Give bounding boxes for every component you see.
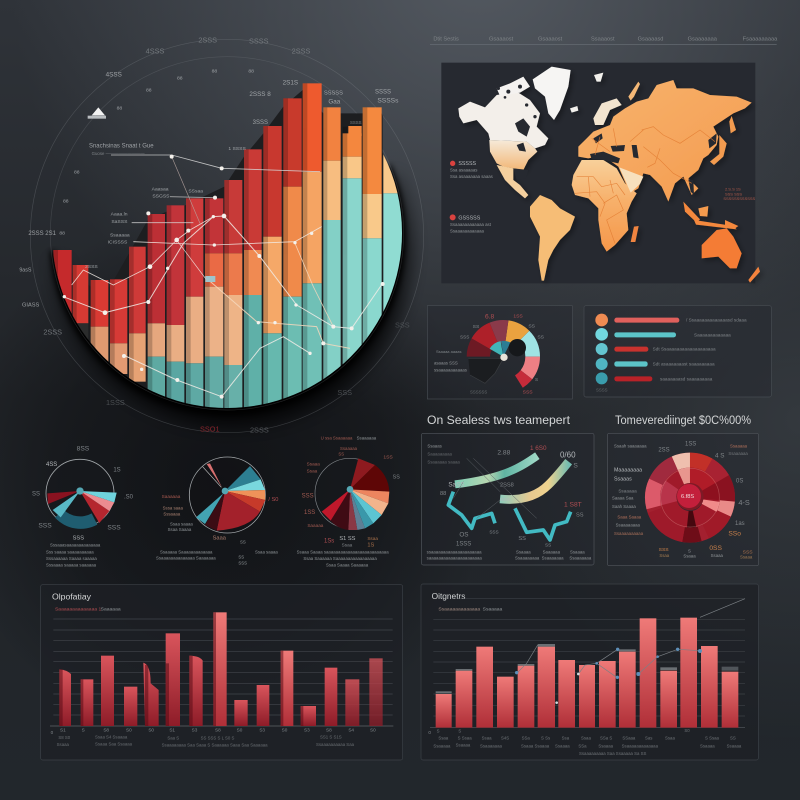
- chart labels: 88: [212, 69, 217, 75]
- left chart axis labels: S3: [259, 728, 265, 733]
- left chart axis labels: Saa S: [167, 735, 179, 740]
- panel: left bar chart: [41, 585, 403, 760]
- right chart axis labels: S4S: [501, 735, 509, 740]
- right chart axis labels: Ssaaa Ssaaaa: [521, 743, 550, 748]
- right chart axis labels: SSaaa: [622, 735, 636, 740]
- chart labels: Guose —————————: [92, 151, 145, 156]
- right chart axis labels: S Ss: [541, 735, 550, 740]
- chart labels: ICISSSS: [108, 239, 128, 245]
- pie 1: Sss saaaa saaaaaaaaaa: [46, 549, 94, 554]
- donut outer ring: [639, 447, 741, 549]
- left chart title: Saaaaaa: [101, 606, 121, 612]
- pie 1: .S0: [124, 494, 134, 500]
- pie 3: Ssaaa Saaaa saaaaaaaaaaaaaaaaaaaaaaaaaa: [297, 549, 389, 554]
- donut labels: Ssaaas: [614, 476, 632, 482]
- ribbon labels: Saaaaaaaaa: [427, 452, 452, 457]
- map background: [441, 63, 755, 283]
- chart labels: 88: [59, 231, 65, 237]
- left chart grid: [50, 619, 393, 726]
- pie 2: [156, 457, 278, 565]
- donut labels: Ssaaa: [740, 554, 753, 559]
- chart labels: 88: [63, 199, 69, 205]
- left chart axis labels: S3: [192, 728, 198, 733]
- ribbon labels: Ssaaaaaa saaaa: [427, 459, 460, 464]
- pie 2: / S0: [268, 497, 278, 503]
- right chart axis labels: S: [458, 729, 461, 734]
- left chart bar sides: [59, 612, 303, 726]
- pie 3: Ssaaa: [307, 462, 320, 467]
- chart labels: Snachsinas Snaat t Gue: [89, 144, 154, 150]
- ribbon labels: S: [573, 463, 578, 470]
- panel: world map header labels: [430, 36, 778, 44]
- pie 2: SSS: [238, 560, 247, 565]
- pie 3: 1SS: [383, 455, 393, 461]
- pie 2: Ssaaaaa Saaaaaaaaaaaaa: [160, 549, 213, 554]
- right chart axis labels: Ssaa: [581, 735, 591, 740]
- ribbon labels: SSS: [500, 497, 511, 503]
- pie 3: U ssa Ssaaaaaa: [321, 435, 353, 440]
- chart labels: 2SSS 8: [249, 91, 271, 98]
- gauge labels: 6.8: [485, 313, 495, 320]
- ribbon labels: SaSS: [448, 481, 465, 488]
- right chart bar caps: [436, 644, 738, 693]
- right chart title: Ssaaaaaaaaaaaaa: [438, 607, 480, 613]
- gauge labels: ssaaaaaaaaaaas: [434, 368, 467, 373]
- panel: world map header labels: Gsaaaaaaa: [688, 36, 718, 42]
- ribbon labels: Ssaaas: [427, 443, 442, 448]
- pie 2: Ssaa Saaaa: [168, 527, 192, 532]
- pie 3: Ssaaaaaa: [357, 435, 377, 440]
- gauge labels: SS: [528, 324, 536, 330]
- ribbon labels: SS: [576, 513, 584, 519]
- left chart axis labels: Ssaaa: [57, 742, 70, 747]
- left chart axis labels: S4: [348, 728, 354, 733]
- pie 3: Ssaaaaa: [340, 446, 358, 451]
- right chart axis labels: Ssa: [562, 735, 570, 740]
- right chart axis labels: Ssaa: [482, 735, 492, 740]
- chart labels: SSO1: [200, 425, 220, 434]
- pie 2: Sssa saaa: [163, 505, 183, 510]
- chart labels: 4SSS: [106, 72, 122, 79]
- chart labels: 2SSS 2S1: [28, 231, 57, 237]
- right chart grid: [430, 599, 745, 727]
- list row 2: [595, 328, 731, 341]
- right chart axis labels: SSa S: [600, 735, 612, 740]
- pie 2: Ssaa saaaa: [170, 522, 193, 527]
- heading: sankey: On Sealess tws teamepert: [427, 413, 571, 427]
- pie 2: Sssaaaa: [163, 511, 181, 516]
- chart labels: 88: [117, 105, 122, 111]
- chart labels: 2SSS: [250, 426, 269, 435]
- donut labels: Ssaaaaaa: [728, 451, 748, 456]
- chart labels: 88: [248, 69, 254, 75]
- donut labels: 1SS: [685, 442, 696, 448]
- left chart axis labels: SS1 S S1S: [320, 735, 342, 740]
- ribbon labels: Ssaaaaaaa: [542, 555, 564, 560]
- left chart axis labels: S0: [148, 728, 154, 733]
- ribbon labels: Ssaaaa: [570, 549, 585, 554]
- donut labels: 0S: [736, 478, 743, 484]
- right chart axis labels: Sas: [645, 735, 652, 740]
- chart labels: SSSSS: [324, 90, 343, 96]
- right chart axis labels: Ssaaaaaaaaaaaaa: [622, 743, 659, 748]
- land masses: old world: [572, 80, 760, 283]
- chart labels: SSS: [395, 320, 410, 329]
- chart labels: 2SSS: [292, 46, 311, 55]
- gauge labels: asaaas SSS: [434, 360, 458, 365]
- pie 3: Ssaa Saaaa Saaaaaa: [326, 563, 369, 568]
- chart labels: Gaa: [328, 98, 341, 105]
- left chart axis labels: S1: [60, 728, 66, 733]
- pie 1: [32, 446, 134, 568]
- donut center value: [676, 483, 704, 510]
- donut labels: Ssaaa: [711, 553, 724, 558]
- right chart axis labels: Ssaaaaaaaaa Saa Ssaaaaa Sa SS: [579, 751, 646, 756]
- ribbon labels: saaaaaaaaaaaaaaaaaaaaaa: [427, 555, 482, 560]
- ribbon labels: SSS: [489, 529, 499, 534]
- left chart axis labels: Ssaaaaaaaaaa Saa: [316, 742, 355, 747]
- right chart axis labels: Ssaaaaa: [433, 743, 451, 748]
- land masses: americas: [458, 67, 603, 281]
- left chart axis labels: S8 S0: [58, 735, 71, 740]
- chart labels: SaSSS: [111, 219, 128, 225]
- panel: world map header labels: Dtit Sestis: [433, 36, 459, 42]
- list row 4: [596, 358, 715, 370]
- chart labels: 2SSS: [198, 36, 217, 45]
- chart labels: SSGSS: [152, 194, 170, 200]
- left chart axis labels: S8: [326, 728, 332, 733]
- right chart axis labels: SSa: [578, 743, 587, 748]
- donut labels: Saah Saaaa: [612, 504, 636, 509]
- left chart axis labels: S0: [237, 728, 243, 733]
- left chart axis labels: S: [82, 728, 85, 733]
- panel: gauge: [427, 306, 572, 399]
- pie 3: 1S: [367, 543, 374, 549]
- left chart axis labels: S0: [282, 728, 288, 733]
- pie 2: Saaaaaa: [162, 494, 181, 499]
- panel: world map header labels: Gsaaaasd: [638, 36, 663, 42]
- chart labels: 9asS: [19, 267, 32, 273]
- map legend: Ssa asaaaaas: [450, 168, 477, 173]
- panel: world map header labels: Fsaaaaaaaaa: [743, 36, 778, 42]
- right chart axis labels: S Ssaa: [458, 735, 472, 740]
- ribbon labels: SS: [545, 543, 551, 548]
- panel: ribbon flow chart: [421, 433, 594, 565]
- ribbon labels: 88: [440, 491, 446, 497]
- left chart axis labels: Ssaaa Saa Ssaaaa: [95, 741, 133, 746]
- gauge labels: SSS: [460, 334, 469, 339]
- ribbon labels: 1 S8T: [564, 502, 582, 509]
- list row 5: [596, 372, 713, 384]
- gauge labels: [434, 313, 545, 396]
- ribbon labels: [427, 443, 592, 560]
- donut labels: 1as: [735, 521, 745, 527]
- donut labels: Ssaaaaa: [730, 444, 748, 449]
- list row 4: Sdt asaaaaaaast saaaaaaaaa: [653, 362, 715, 367]
- chart labels: SSSS: [249, 36, 269, 45]
- chart labels: SSsaa: [188, 189, 203, 195]
- right chart axis labels: Ssaa: [665, 735, 675, 740]
- left chart title: Saaaaaaaaaaaaaa 1: [55, 606, 102, 612]
- list row 1: / Ssaaaaaaaaaaaaasd sdaaa: [686, 318, 747, 323]
- donut labels: 0SS: [709, 545, 722, 552]
- donut inner ring: [660, 468, 720, 527]
- right chart title: [432, 591, 503, 613]
- gauge labels: SS: [473, 324, 480, 330]
- pie 1: Sssaaasaaaaaaaaaaaaaa: [50, 543, 101, 548]
- left chart axis labels: S8: [103, 728, 109, 733]
- list row 5: saaaaaaasd saaaaaaaaa: [660, 376, 713, 381]
- icon: triangle marker: [88, 107, 106, 119]
- donut labels: 4 S: [715, 453, 724, 460]
- donut labels: [612, 442, 753, 559]
- donut labels: SSS: [659, 547, 669, 553]
- ribbon labels: Saaaaaa: [543, 549, 561, 554]
- pie 3: Ssaa Saaaaaa Saaaaaaaaaaaaaaaaa: [303, 556, 377, 561]
- ribbon labels: 0/60: [560, 451, 576, 460]
- chart labels: SSSSs: [377, 98, 399, 105]
- chart labels: 88: [177, 75, 183, 81]
- panel: donut chart: [607, 433, 759, 566]
- chart shadow: [50, 163, 411, 426]
- pie 3: SS: [338, 452, 344, 457]
- gauge labels: 1SS: [513, 314, 523, 320]
- pie 2: Ssaa saaaa: [255, 549, 278, 554]
- list footnote: SSSS: [596, 388, 608, 393]
- chart labels: Aaasaa: [152, 187, 169, 193]
- pie 1: Sssaaaa saaaaa saaaaaa: [46, 563, 97, 568]
- donut labels: Ssaah saaaaaaa: [614, 444, 647, 449]
- gauge labels: Ssaaaa aaaas: [436, 349, 461, 354]
- panel: world map header labels: Gsaaaost: [489, 36, 514, 42]
- chart labels: 1 SSSS: [228, 146, 246, 152]
- left chart title: Olpofatiay: [52, 591, 92, 601]
- gauge chart: [462, 315, 545, 398]
- ribbon labels: Ssaaaaaaaa: [515, 555, 540, 560]
- right chart axis labels: Ssaaaa: [727, 743, 742, 748]
- left chart axis labels: Ssaaaaaaaa Saa Saaa S Saaaaaa Saaa Saa Saaaaaa: [162, 743, 268, 748]
- panel: pie charts: [32, 435, 400, 568]
- pie 3: 1SS: [304, 510, 315, 516]
- donut labels: 2SS: [658, 448, 670, 454]
- left chart axis labels: Ssaa S4 Ssaaaa: [95, 734, 128, 739]
- left chart axis labels: S0: [370, 728, 376, 733]
- chart labels: Ssaaaaa: [110, 232, 130, 238]
- ribbon labels: OS: [459, 532, 468, 539]
- pie 1: SS: [32, 492, 40, 498]
- map legend: Ssa asaaaaaaa saaas: [450, 174, 493, 179]
- ribbon labels: Ssaaaa: [516, 549, 531, 554]
- panel: main circular bar chart: [19, 36, 424, 435]
- right chart axis labels: S Ssaa: [705, 735, 720, 740]
- left chart axis labels: S0: [126, 728, 132, 733]
- pie 3: Ssaa: [367, 536, 378, 541]
- right chart axis labels: 0: [428, 730, 431, 735]
- map legend: Ssaaaaaaaaaaaa: [450, 229, 485, 234]
- north america details: [497, 85, 537, 180]
- donut labels: S: [688, 548, 691, 553]
- pie 3: Ssaa: [307, 468, 318, 473]
- heading: donut: Tomeverediinget $0C%00%: [615, 413, 751, 427]
- left chart axis labels: S8: [215, 728, 221, 733]
- chart labels: 2SSS: [43, 328, 62, 337]
- chart labels: 1SSS: [106, 398, 125, 407]
- right chart markers: [515, 648, 702, 704]
- map legend: 2.S.S 1S: [725, 187, 741, 192]
- list row 2: Saaaaaaaaaaaaa: [694, 332, 731, 337]
- right chart axis labels: SSa: [522, 735, 530, 740]
- chart labels: Aaaa.ln: [111, 212, 128, 218]
- panel: world map header labels: Gsaaaost: [538, 36, 563, 42]
- chart labels: 4SSS: [146, 46, 165, 55]
- donut labels: Ssaa: [659, 553, 670, 558]
- donut labels: 4-S: [738, 498, 750, 507]
- pie 1: 4SS: [46, 462, 57, 468]
- pie 3: S1 SS: [339, 536, 356, 542]
- pie 2: Saaa: [213, 535, 227, 541]
- chart labels: SSSS: [375, 90, 391, 96]
- chart labels: SSSS: [350, 120, 362, 125]
- right chart title: Ssaaaaa: [483, 607, 503, 613]
- gauge labels: SSS: [523, 390, 533, 396]
- ribbon labels: 2SS8: [500, 483, 514, 489]
- right chart axis labels: S0: [684, 728, 690, 733]
- pie 3: SS: [393, 474, 400, 480]
- chart labels: 88: [146, 87, 152, 93]
- trend line markers: [63, 155, 385, 399]
- right chart overlay line: [517, 599, 745, 677]
- panel: progress list: [584, 306, 771, 397]
- list row 1: [595, 314, 747, 326]
- panel: world map: [441, 63, 760, 283]
- trend lines: [63, 155, 383, 397]
- ribbon labels: 2.88: [497, 449, 511, 456]
- right chart axis labels: Ssaaaa: [598, 743, 614, 748]
- map legend: GSSSSS: [458, 215, 481, 221]
- chart labels: SSS: [337, 388, 352, 397]
- left chart axis labels: S3: [304, 728, 310, 733]
- donut labels: Ssaaaaaaaaaa: [614, 531, 644, 536]
- chart labels: 3SSS: [253, 120, 268, 126]
- ribbon labels: 1 6S0: [530, 445, 547, 452]
- pie 2: SS: [238, 554, 244, 559]
- panel: world map header labels: Ssaaaost: [591, 36, 615, 42]
- map legend: SSS SSS: [725, 191, 742, 196]
- pie 1: SSS: [73, 535, 84, 541]
- ribbon labels: 1SSS: [456, 542, 471, 548]
- chart labels: 2S1S: [283, 79, 298, 86]
- pie 3: Ssaa: [342, 543, 353, 548]
- map seas and borders: [575, 127, 717, 243]
- left chart axis labels: [51, 728, 376, 748]
- right chart axis labels: SS: [730, 735, 736, 740]
- map legend: SSSSS: [458, 161, 477, 167]
- left chart bars: [59, 612, 383, 726]
- donut labels: Saaaa Saa: [612, 496, 634, 501]
- gauge labels: SS: [537, 334, 545, 340]
- donut center value: 6.f8S: [681, 494, 694, 500]
- right chart axis labels: Ssaaaa: [456, 743, 471, 748]
- pie 3: SSS: [302, 494, 314, 500]
- gauge labels: S: [535, 377, 538, 382]
- right chart axis labels: Ssaaaa: [555, 743, 570, 748]
- right chart axis labels: Ssaa: [438, 735, 449, 740]
- donut labels: SSo: [728, 531, 741, 538]
- ribbons: [448, 456, 571, 540]
- right chart axis labels: Ssaaaa: [700, 743, 715, 748]
- chart labels: 2SSS: [85, 264, 98, 270]
- pie 3: 1Ss: [324, 539, 334, 545]
- donut guide circle: [661, 468, 719, 527]
- chart labels: 88: [74, 169, 80, 175]
- right chart bars: [436, 618, 738, 728]
- ribbon labels: ssaaaaaaaaaaaaaaaaaaaaa: [427, 549, 482, 554]
- donut labels: SSS: [743, 549, 753, 555]
- left chart axis labels: 0: [51, 730, 54, 735]
- pie 1: Sssaaaaaa Saaaa saaaaa: [46, 556, 97, 561]
- pie 2: Ssaaaaaaaaaaaaaa Saaaaaaa: [156, 555, 216, 560]
- pie 1: 1S: [113, 467, 121, 473]
- donut labels: Ssaaa: [683, 554, 696, 559]
- right chart axis labels: Ssaaaaaaa: [480, 743, 502, 748]
- pie 3: Saaaaa: [307, 523, 324, 528]
- list row 3: Sdt Ssaaaaaaaaaaaaaaaaaaa: [653, 347, 716, 352]
- right chart axis labels: [428, 728, 742, 756]
- stacked bars: [50, 83, 403, 414]
- donut labels: Ssaaaaa: [618, 488, 637, 493]
- outer guide rings: [30, 39, 424, 433]
- right chart title: Oitgnetrs: [432, 591, 465, 601]
- left chart title: [52, 591, 121, 612]
- left chart axis labels: SS SSS S L S0 S: [201, 735, 235, 740]
- map legend: [450, 161, 756, 234]
- pie 3: [297, 435, 400, 568]
- pie 1: SSS: [107, 524, 121, 531]
- right chart axis labels: S: [437, 729, 440, 734]
- map legend: Ssaaaaaaaaaaaa ast: [450, 222, 492, 227]
- pie 1: SSS: [38, 523, 52, 530]
- ribbon labels: SS: [518, 536, 526, 542]
- ribbon labels: Ssaaaaaaa: [569, 555, 592, 560]
- list row 3: [596, 343, 716, 355]
- chart labels: [19, 36, 410, 435]
- donut labels: Ssaaaaaaaa: [616, 523, 641, 528]
- donut labels: Saaa Saaaa: [617, 514, 642, 519]
- pie 1: 8SS: [77, 446, 90, 453]
- pie 2: SS: [240, 539, 246, 544]
- donut labels: Maaaaaaaa: [614, 468, 642, 474]
- chart labels: GIASS: [22, 303, 40, 309]
- gauge labels: SSSSSS: [470, 389, 487, 394]
- left chart axis labels: S1: [169, 728, 175, 733]
- panel: right bar chart: [421, 584, 758, 760]
- map legend: SSSSSSSSSSSS: [723, 196, 756, 201]
